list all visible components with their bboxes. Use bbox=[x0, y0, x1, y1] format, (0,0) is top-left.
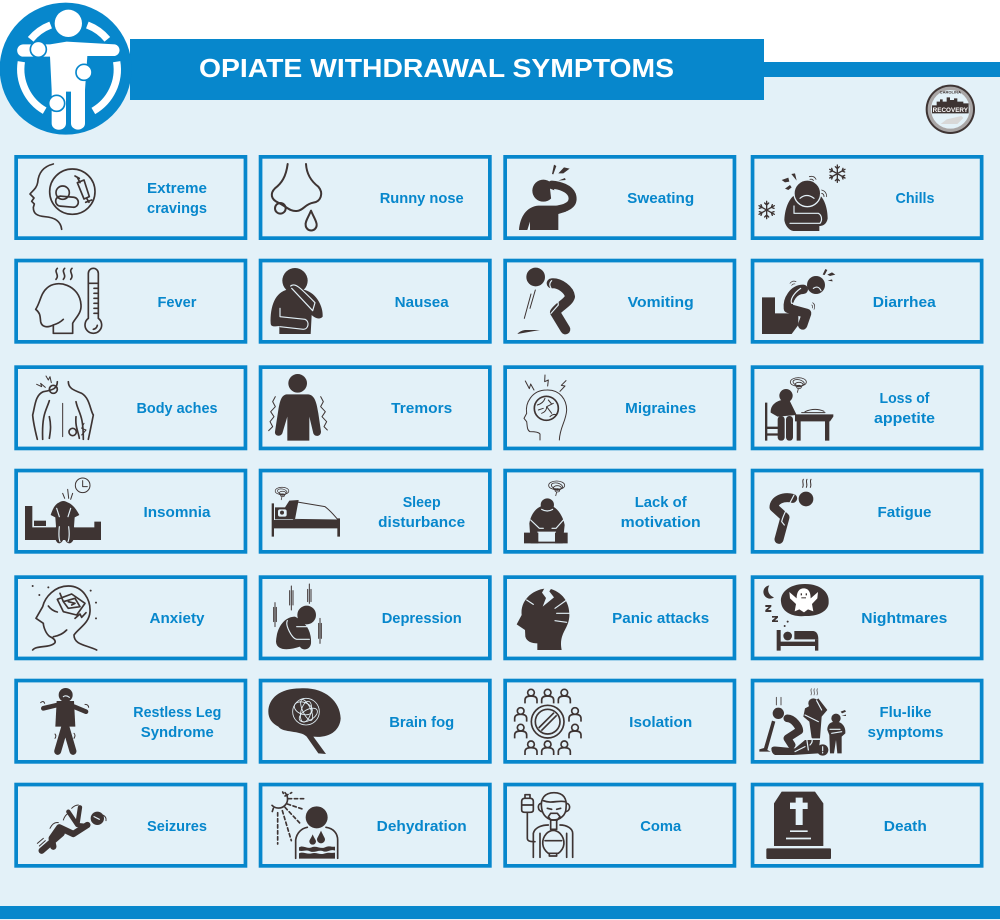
icon: patient on oxygen mask with IV bbox=[522, 793, 573, 857]
label: motivation bbox=[621, 514, 701, 531]
icon: shivering person with snowflakes bbox=[759, 165, 845, 231]
icon: cracked head bbox=[517, 584, 570, 650]
label: cravings bbox=[147, 200, 207, 217]
icon: people around prohibition sign bbox=[515, 689, 581, 755]
header banner bbox=[130, 39, 1000, 100]
label: Tremors bbox=[391, 400, 452, 417]
label: Syndrome bbox=[141, 724, 214, 741]
label: disturbance bbox=[378, 514, 465, 531]
label bbox=[133, 704, 221, 741]
label: Anxiety bbox=[150, 610, 205, 627]
panel: Anxiety bbox=[16, 577, 245, 658]
icon: Carolina Recovery badge: RECOVERY bbox=[933, 107, 969, 114]
panel: Sweating bbox=[505, 157, 734, 238]
label: Restless Leg bbox=[133, 704, 221, 721]
panel: Dehydration bbox=[261, 785, 490, 866]
panel: Nausea bbox=[261, 261, 490, 342]
label: Seizures bbox=[147, 818, 207, 835]
panel: Loss of appetite bbox=[753, 367, 982, 448]
icon: restless person in bed bbox=[272, 487, 340, 537]
icon: person wiping forehead bbox=[519, 165, 573, 230]
icon: person covering mouth bbox=[271, 268, 323, 334]
icon: body with pain points bbox=[0, 3, 132, 135]
label bbox=[874, 390, 935, 427]
label: Fever bbox=[158, 294, 197, 311]
icon: person at table bbox=[765, 378, 833, 441]
title: OPIATE WITHDRAWAL SYMPTOMS bbox=[199, 55, 674, 83]
icon: person under sun bbox=[272, 792, 338, 859]
label: Body aches bbox=[136, 400, 218, 417]
label: Extreme bbox=[147, 180, 207, 197]
panel: Seizures bbox=[16, 785, 245, 866]
icon: person trembling bbox=[269, 374, 327, 441]
label: Chills bbox=[896, 190, 934, 207]
panel: Lack of motivation bbox=[505, 471, 734, 552]
icon: Carolina Recovery badge: CAROLINA bbox=[940, 91, 961, 95]
panel: Restless Leg Syndrome bbox=[16, 681, 245, 762]
panel: Death bbox=[753, 785, 982, 866]
panel: Diarrhea bbox=[753, 261, 982, 342]
panel: Isolation bbox=[505, 681, 734, 762]
panel: Panic attacks bbox=[505, 577, 734, 658]
icon: person vomiting bbox=[517, 268, 570, 334]
icon: person having seizure bbox=[37, 805, 106, 851]
icon: exhausted person bending over bbox=[774, 479, 813, 539]
panel: Depression bbox=[261, 577, 490, 658]
panel: Migraines bbox=[505, 367, 734, 448]
panel: Fatigue bbox=[753, 471, 982, 552]
label: Flu-like bbox=[880, 704, 932, 721]
label: Fatigue bbox=[878, 504, 932, 521]
label bbox=[378, 494, 465, 531]
icon: person with restless limbs bbox=[41, 688, 89, 751]
label: Nightmares bbox=[861, 610, 947, 627]
icon: dreaming of ghost in bed bbox=[763, 584, 829, 651]
icon: person on toilet bbox=[762, 269, 835, 334]
label: Migraines bbox=[625, 400, 696, 417]
label: Death bbox=[884, 818, 927, 835]
icon: head with thermometer bbox=[36, 268, 102, 333]
panel: Insomnia bbox=[16, 471, 245, 552]
icon: head with brain and lightning bbox=[524, 375, 567, 440]
icon: head with tangled thoughts bbox=[32, 585, 97, 650]
panel: Tremors bbox=[261, 367, 490, 448]
label: Vomiting bbox=[628, 294, 694, 311]
label: Panic attacks bbox=[612, 610, 709, 627]
icon: nose with drip bbox=[272, 164, 321, 230]
label: Brain fog bbox=[389, 714, 454, 731]
label: Nausea bbox=[395, 294, 449, 311]
panel: Body aches bbox=[16, 367, 245, 448]
label bbox=[868, 704, 944, 741]
panel: Brain fog bbox=[261, 681, 490, 762]
icon: person sitting on bed with clock bbox=[25, 478, 101, 543]
panel: Nightmares bbox=[753, 577, 982, 658]
label: symptoms bbox=[868, 724, 944, 741]
panel: Coma bbox=[505, 785, 734, 866]
label bbox=[621, 494, 701, 531]
panel: Sleep disturbance bbox=[261, 471, 490, 552]
icon: tombstone with cross bbox=[766, 792, 831, 859]
label: Lack of bbox=[635, 494, 688, 511]
label: Insomnia bbox=[144, 504, 211, 521]
panel: Vomiting bbox=[505, 261, 734, 342]
icon: person hugging knees bbox=[274, 584, 321, 649]
panel: Chills bbox=[753, 157, 982, 238]
icon: head with pills and syringe bbox=[30, 164, 95, 229]
icon: person slumped on bench bbox=[524, 481, 568, 543]
label: Sleep bbox=[403, 494, 441, 511]
panel: Extreme cravings bbox=[16, 157, 245, 238]
label: Runny nose bbox=[380, 190, 464, 207]
label: Diarrhea bbox=[873, 294, 936, 311]
panel: Flu-like symptoms bbox=[753, 681, 982, 762]
icon: back with pain points bbox=[33, 376, 93, 439]
icon: Carolina Recovery badge bbox=[926, 85, 975, 134]
label: Loss of bbox=[880, 390, 930, 407]
label: appetite bbox=[874, 410, 935, 427]
icon: group of sick people bbox=[759, 689, 846, 756]
footer bar bbox=[0, 906, 1000, 919]
label bbox=[147, 180, 207, 217]
icon: brain with tangle bbox=[268, 688, 341, 754]
label: Sweating bbox=[627, 190, 694, 207]
panel: Fever bbox=[16, 261, 245, 342]
label: Isolation bbox=[629, 714, 692, 731]
label: Dehydration bbox=[377, 818, 467, 835]
panel: Runny nose bbox=[261, 157, 490, 238]
label: Depression bbox=[382, 610, 462, 627]
label: Coma bbox=[640, 818, 682, 835]
